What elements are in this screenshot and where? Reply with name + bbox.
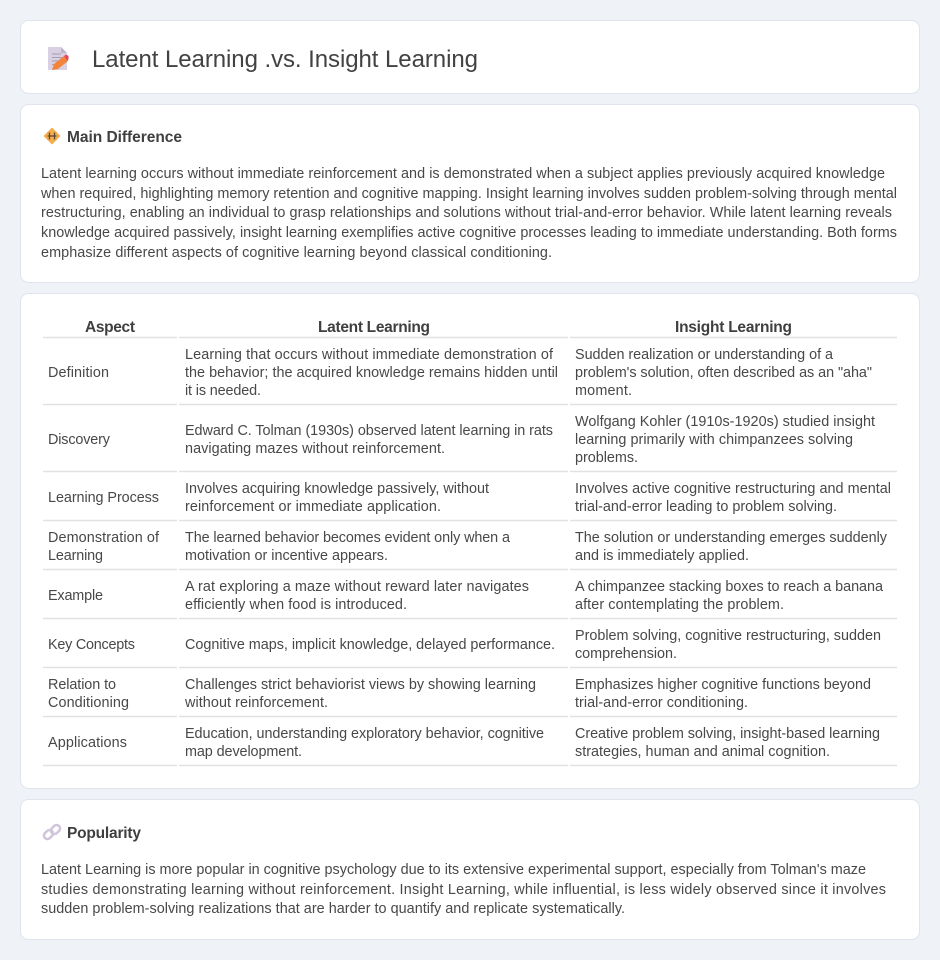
text block: popularity: sudden problem-solving realizations that are harder to quantify and replicate systematically. (41, 901, 625, 917)
row: demonstration of learning: The solution or understanding emerges suddenly (575, 530, 888, 546)
text block: main difference: knowledge acquired passively, insight learning exemplifies active cognitive processes leading to immediate understanding. Both forms (41, 225, 897, 241)
row: relation to conditioning: Challenges strict behaviorist views by showing learning (185, 677, 536, 693)
row: key concepts (48, 628, 881, 662)
row: applications: Education, understanding exploratory behavior, cognitive (185, 726, 544, 742)
row: demonstration of learning: Learning (48, 548, 103, 564)
panel: title header (20, 20, 920, 94)
row: definition: it is needed. (185, 383, 261, 399)
table header row: Insight Learning (675, 319, 792, 336)
icon: memo with pencil (48, 47, 68, 70)
row: learning process: Involves active cognitive restructuring and mental (575, 481, 891, 497)
row: definition: the behavior; the acquired knowledge remains hidden until (185, 365, 558, 381)
text block: popularity: Latent Learning is more popular in cognitive psychology due to its extensive experimental support, especially from Tolman's maze (41, 862, 866, 878)
row: discovery: learning primarily with chimpanzees solving (575, 432, 853, 448)
row: example: efficiently when food is introduced. (185, 597, 407, 613)
table header row: Latent Learning (318, 319, 430, 336)
row: demonstration of learning: The learned behavior becomes evident only when a (185, 530, 510, 546)
row: demonstration of learning: Demonstration of (48, 530, 160, 546)
heading: main difference: Main Difference (67, 129, 182, 146)
row: learning process: Involves acquiring knowledge passively, without (185, 481, 489, 497)
row: example (48, 579, 883, 613)
row: applications: Applications (48, 735, 127, 751)
row: key concepts: Problem solving, cognitive restructuring, sudden (575, 628, 881, 644)
row: relation to conditioning: Emphasizes higher cognitive functions beyond (575, 677, 871, 693)
row: example: after contemplating the problem. (575, 597, 784, 613)
row: relation to conditioning: Relation to (48, 677, 116, 693)
row: relation to conditioning: Conditioning (48, 695, 129, 711)
row: applications (48, 726, 880, 760)
icon: diamond warning sign (44, 128, 60, 144)
panel: main difference (20, 104, 920, 282)
row: learning process: trial-and-error leading to problem solving. (575, 499, 837, 515)
panel: popularity (20, 800, 920, 940)
row: applications: strategies, human and animal cognition. (575, 744, 830, 760)
row: definition: Learning that occurs without immediate demonstration of (185, 347, 554, 363)
row: relation to conditioning (48, 677, 871, 711)
heading: popularity: Popularity (67, 825, 141, 842)
row: demonstration of learning (48, 530, 888, 564)
text block: main difference: Latent learning occurs without immediate reinforcement and is demonstrated when a subject applies previously acquired knowledge (41, 166, 885, 182)
row: demonstration of learning: and is immediately applied. (575, 548, 749, 564)
row: learning process: reinforcement or immediate application. (185, 499, 441, 515)
text block: popularity (41, 862, 886, 917)
row: applications: Creative problem solving, insight-based learning (575, 726, 880, 742)
row: key concepts: Key Concepts (48, 637, 135, 653)
row: learning process: Learning Process (48, 490, 159, 506)
row: discovery: Discovery (48, 432, 111, 448)
row: definition: Sudden realization or understanding of a (575, 347, 833, 363)
table header row: Aspect (85, 319, 135, 336)
row: relation to conditioning: trial-and-error conditioning. (575, 695, 748, 711)
row: example: A rat exploring a maze without reward later navigates (185, 579, 529, 595)
row: discovery: navigating mazes without reinforcement. (185, 441, 445, 457)
text block: main difference: emphasize different aspects of cognitive learning beyond classical conditioning. (41, 245, 552, 261)
row: definition: Definition (48, 365, 109, 381)
row: relation to conditioning: without reinforcement. (184, 695, 328, 711)
text block: main difference: when required, highlighting memory retention and cognitive mapping. Insight learning involves sudden problem-solving through mental (40, 186, 897, 202)
text block: main difference: restructuring, enabling an individual to grasp relationships and solutions without trial-and-error behavior. While latent learning reveals (41, 205, 892, 221)
title: Latent Learning .vs. Insight Learning (92, 46, 478, 73)
row: applications: map development. (185, 744, 302, 760)
panel: comparison table (20, 294, 920, 788)
row: discovery: Edward C. Tolman (1930s) observed latent learning in rats (185, 423, 553, 439)
row: key concepts: Cognitive maps, implicit knowledge, delayed performance. (185, 637, 555, 653)
row: discovery: problems. (575, 450, 638, 466)
row: key concepts: comprehension. (575, 646, 677, 662)
row: discovery (48, 414, 875, 466)
row: definition (48, 347, 872, 399)
table header row (85, 319, 792, 336)
row: example: Example (48, 588, 103, 604)
row: definition: problem's solution, often described as an "aha" (575, 365, 872, 381)
icon: chain link (42, 823, 62, 841)
row: definition: moment. (575, 383, 632, 399)
row: demonstration of learning: motivation or incentive appears. (185, 548, 388, 564)
text block: popularity: studies demonstrating learning without reinforcement. Insight Learning, while influential, is less widely observed since it involves (41, 882, 886, 898)
text block: main difference (40, 166, 897, 261)
row: discovery: Wolfgang Kohler (1910s-1920s) studied insight (575, 414, 875, 430)
row: example: A chimpanzee stacking boxes to reach a banana (575, 579, 883, 595)
row: learning process (48, 481, 891, 515)
